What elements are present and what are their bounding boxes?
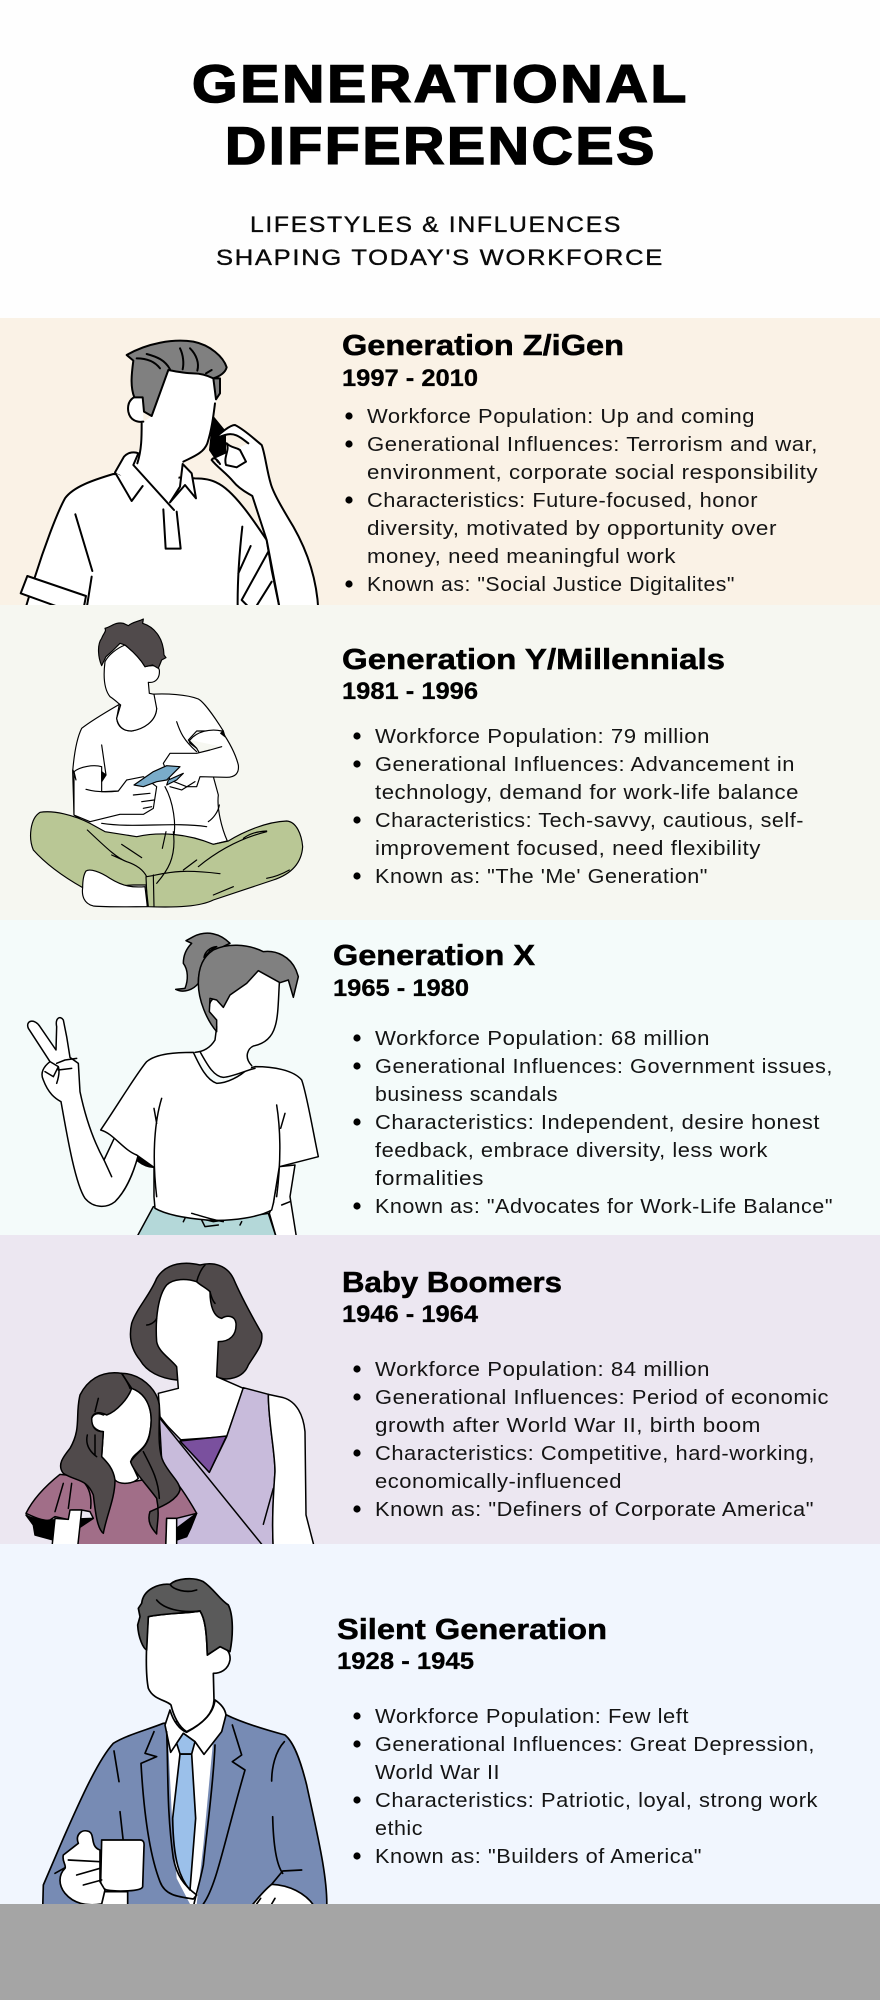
bullet list: ethic — [375, 1817, 423, 1840]
footer band — [0, 1904, 880, 2000]
bullet list: Workforce Population: 84 million — [375, 1358, 710, 1381]
bullet list: Generational Influences: Government issues, — [375, 1055, 833, 1078]
bullet list: Generational Influences: Great Depression, — [375, 1733, 815, 1756]
bullet list: Known as: "The 'Me' Generation" — [375, 865, 708, 888]
bullet list: growth after World War II, birth boom — [375, 1414, 761, 1437]
bullet list — [353, 1705, 818, 1868]
bullet list: Characteristics: Future-focused, honor — [367, 489, 758, 512]
title: GENERATIONAL — [192, 55, 689, 114]
heading: Silent Generation — [337, 1614, 607, 1646]
dates: 1946 - 1964 — [342, 1301, 479, 1328]
bullet list: money, need meaningful work — [367, 545, 676, 568]
title: DIFFERENCES — [225, 117, 657, 176]
bullet list: Generational Influences: Terrorism and war, — [367, 433, 818, 456]
title — [192, 55, 689, 176]
heading: Generation Z/iGen — [342, 330, 624, 362]
illustration: man on phone — [21, 341, 318, 610]
panel: Generation X — [0, 920, 880, 1239]
bullet list: Generational Influences: Advancement in — [375, 753, 795, 776]
bullet list: improvement focused, need flexibility — [375, 837, 761, 860]
bullet list: Workforce Population: Few left — [375, 1705, 689, 1728]
bullet list: Known as: "Definers of Corporate America" — [375, 1498, 814, 1521]
panel: Silent Generation — [0, 1544, 880, 1910]
heading: Generation X — [333, 940, 536, 972]
bullet list: Characteristics: Independent, desire honest — [375, 1111, 820, 1134]
dates: 1928 - 1945 — [337, 1648, 474, 1675]
header — [0, 0, 880, 318]
bullet list: World War II — [375, 1761, 500, 1784]
bullet list: business scandals — [375, 1083, 558, 1106]
bullet list: Characteristics: Patriotic, loyal, strong work — [375, 1789, 818, 1812]
bullet list: diversity, motivated by opportunity over — [367, 517, 777, 540]
bullet list — [353, 725, 804, 888]
dates: 1997 - 2010 — [342, 365, 478, 392]
heading: Generation Y/Millennials — [342, 644, 725, 676]
bullet list — [353, 1027, 833, 1218]
bullet list: formalities — [375, 1167, 484, 1190]
illustration: man in suit with mug — [43, 1579, 327, 1910]
bullet list — [345, 405, 818, 596]
bullet list: Workforce Population: 68 million — [375, 1027, 710, 1050]
bullet list — [353, 1358, 829, 1521]
panel: Generation Y — [0, 605, 880, 920]
panel: Generation Z — [0, 318, 880, 610]
bullet list: Generational Influences: Period of economic — [375, 1386, 829, 1409]
dates: 1965 - 1980 — [333, 975, 469, 1002]
bullet list: feedback, embrace diversity, less work — [375, 1139, 768, 1162]
bullet list: Known as: "Social Justice Digitalites" — [367, 573, 735, 596]
bullet list: Known as: "Advocates for Work-Life Balance" — [375, 1195, 833, 1218]
illustration: mother and daughter — [26, 1263, 315, 1550]
bullet list: environment, corporate social responsibility — [367, 461, 818, 484]
heading: Baby Boomers — [342, 1267, 562, 1299]
illustration: seated gamer — [31, 619, 303, 907]
dates: 1981 - 1996 — [342, 678, 478, 705]
bullet list: Workforce Population: 79 million — [375, 725, 710, 748]
subtitle — [216, 212, 664, 270]
bullet list: technology, demand for work-life balance — [375, 781, 799, 804]
panel: Baby Boomers — [0, 1235, 880, 1550]
illustration: woman with peace sign — [28, 933, 318, 1239]
bullet list: Characteristics: Competitive, hard-working, — [375, 1442, 815, 1465]
bullet list: Known as: "Builders of America" — [375, 1845, 702, 1868]
subtitle: LIFESTYLES & INFLUENCES — [250, 212, 622, 237]
subtitle: SHAPING TODAY'S WORKFORCE — [216, 245, 664, 270]
bullet list: economically-influenced — [375, 1470, 622, 1493]
bullet list: Characteristics: Tech-savvy, cautious, self- — [375, 809, 804, 832]
bullet list: Workforce Population: Up and coming — [367, 405, 755, 428]
